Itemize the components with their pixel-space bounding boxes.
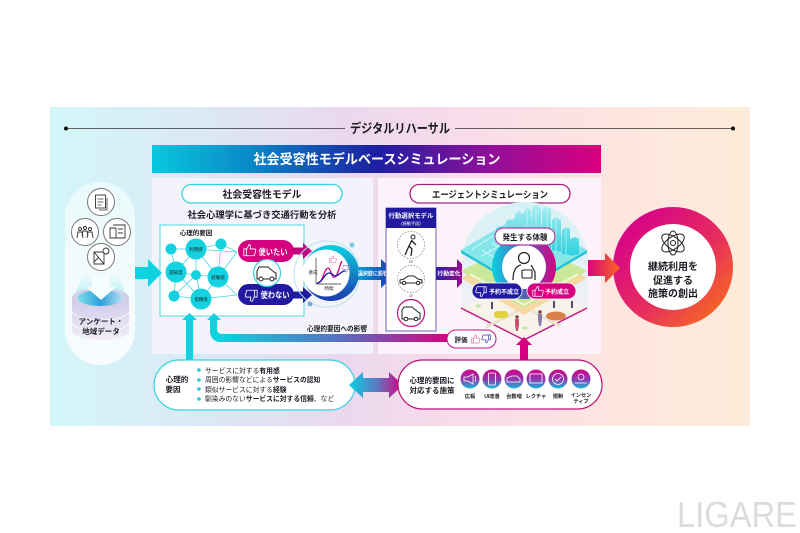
icon: atom	[659, 231, 687, 255]
icon: incentive	[572, 370, 590, 388]
feedback arrow: influence on factors	[207, 313, 450, 342]
pill: measures: 台数増	[506, 392, 522, 400]
want to use pill	[238, 240, 312, 262]
psychological factor network box: 信頼感	[194, 296, 208, 303]
icon: people	[72, 218, 98, 246]
icon: shuttle vehicle	[254, 260, 280, 286]
outcome ring: creating measures: 促進する	[653, 274, 693, 287]
orange arrow to outcome	[588, 253, 620, 283]
title bar	[152, 145, 601, 173]
down arrow	[86, 275, 116, 300]
behavior choice model box	[386, 208, 436, 331]
icon: lecture	[526, 370, 546, 388]
database: 地域データ	[82, 326, 120, 336]
panel: agent simulation	[378, 178, 601, 354]
database	[72, 288, 129, 340]
icon: regulation	[548, 370, 568, 388]
city layer	[461, 205, 587, 290]
pill heading: agent simulation: エージェントシミュレーション	[432, 190, 548, 201]
icon: map pin	[88, 244, 114, 270]
pill: psychological factors: 類似サービスに対する経験	[205, 385, 287, 394]
icon: walking	[398, 232, 424, 258]
pill: measures: インセン	[571, 392, 591, 399]
icon: shuttle	[398, 300, 424, 326]
arrow: factors into model	[182, 313, 197, 361]
pill: reservation failed: 予約不成立	[489, 288, 519, 296]
center ring with person	[492, 235, 556, 299]
label: influence on psychological factors: 心理的要因への影響	[307, 324, 367, 333]
map layer	[461, 276, 587, 340]
icon: more vehicles	[504, 370, 524, 388]
evaluation pill: 評価	[454, 335, 468, 344]
psychological factor network box: 利用感	[189, 246, 203, 253]
outcome ring: creating measures	[613, 207, 733, 327]
pill heading: social acceptance model: 社会受容性モデル	[222, 188, 302, 201]
pill: psychological factors: サービスに対する有用感	[205, 366, 280, 375]
road layer	[461, 246, 587, 315]
database: アンケート・	[79, 317, 123, 326]
subheading: analysis: 社会心理学に基づき交通行動を分析	[188, 209, 337, 220]
outcome ring: creating measures: 継続利用を	[648, 260, 698, 273]
behavior choice model box: (移動手段)	[401, 220, 421, 227]
pill: measures: UI改善	[484, 392, 500, 400]
behavior choice model box: or	[409, 293, 413, 298]
pill: measures: レクチャ	[526, 392, 546, 400]
heading: digital rehearsal with timeline: デジタルリハーサル	[350, 121, 450, 136]
want to use pill: 使いたい	[258, 247, 288, 257]
not use pill: 使わない	[260, 290, 290, 300]
icon: UI improvement	[482, 370, 502, 388]
psychological factor network box: 認知度	[169, 269, 183, 276]
chart ring: usage curve: 時間	[324, 286, 334, 292]
psychological factor network box	[160, 225, 304, 316]
green layer	[461, 239, 587, 308]
pill: psychological factors: 周囲の影響などによるサービスの認知	[205, 375, 321, 384]
title bar: 社会受容性モデルベースシミュレーション	[254, 151, 500, 167]
heading: digital rehearsal with timeline	[64, 121, 735, 136]
pill: measures: 心理的要因に	[410, 375, 454, 385]
behavior choice model box: 行動選択モデル	[388, 212, 434, 220]
icon: documents	[104, 218, 130, 246]
icon: clipboard	[88, 188, 114, 216]
outcome ring: creating measures: 施策の創出	[648, 287, 698, 300]
cyan arrow into model	[135, 259, 162, 287]
pill: reservation success: 予約成立	[545, 288, 569, 296]
pill: measures: 規制	[553, 392, 563, 400]
icon: car	[398, 266, 424, 292]
magenta up arrow to simulation	[516, 337, 532, 361]
chart ring: usage curve	[294, 241, 360, 307]
pill: measures	[398, 360, 602, 409]
pill: psychological factors: 馴染みのないサービスに対する信頼、など	[205, 394, 334, 403]
pill: psychological factors: 要因	[166, 385, 180, 394]
chart ring: usage curve: 意向	[308, 269, 318, 275]
double arrow	[349, 372, 403, 398]
purple arrow: behavior change	[436, 259, 471, 288]
pill: measures: 対応する施策	[410, 385, 455, 395]
psychological factor network box: 経験値	[211, 274, 225, 281]
not use pill	[238, 284, 312, 305]
light beam	[73, 272, 127, 300]
panel: social acceptance model	[152, 178, 373, 354]
pill heading: agent simulation	[410, 184, 570, 203]
pill heading: social acceptance model	[182, 184, 342, 203]
purple arrow: behavior change: 行動変化	[437, 270, 461, 278]
icon: publicity	[460, 370, 480, 388]
pill: measures: 広報	[465, 392, 476, 400]
data sources capsule	[65, 182, 135, 365]
pill: measures: ティブ	[573, 397, 589, 405]
blue arrow: influences options: 選択肢に影響	[358, 270, 388, 278]
pill: psychological factors	[154, 360, 355, 410]
pill: psychological factors: 心理的	[166, 374, 189, 384]
behavior choice model box: or	[409, 259, 413, 264]
isometric city illustration	[461, 202, 588, 340]
blue arrow: influences options	[358, 259, 396, 288]
pill: experience: 発生する体験	[502, 232, 548, 242]
psychological factor network box: 心理的要因	[180, 228, 213, 237]
evaluation pill	[447, 330, 496, 348]
background panel: digital rehearsal	[50, 107, 750, 426]
